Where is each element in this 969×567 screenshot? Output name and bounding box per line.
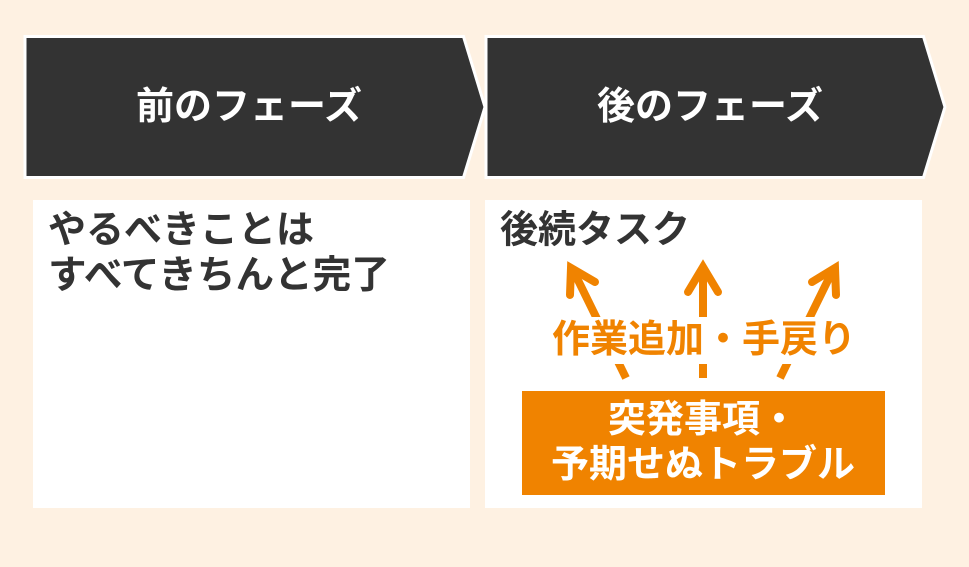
panel: previous phase header: 前のフェーズ	[136, 85, 362, 128]
box: unexpected events and troubles: 突発事項・	[608, 399, 798, 441]
panel: previous phase body: やるべきことは	[48, 210, 314, 252]
panel: previous phase body	[33, 200, 470, 508]
panel: next phase body	[485, 200, 922, 508]
panel: next phase header: 後のフェーズ	[597, 85, 823, 128]
arrow: up left	[570, 268, 626, 378]
panel: previous phase body: すべてきちんと完了	[48, 254, 390, 297]
panel: previous phase header	[25, 36, 485, 178]
box: unexpected events and troubles	[522, 391, 885, 495]
panel: next phase header	[486, 36, 945, 178]
arrow: up right	[780, 268, 836, 378]
label: additional work and rework: 作業追加・手戻り	[552, 319, 856, 361]
box: unexpected events and troubles: 予期せぬトラブル	[551, 443, 855, 486]
arrow: up center	[688, 267, 718, 378]
heading: follow-up tasks: 後続タスク	[500, 210, 690, 252]
